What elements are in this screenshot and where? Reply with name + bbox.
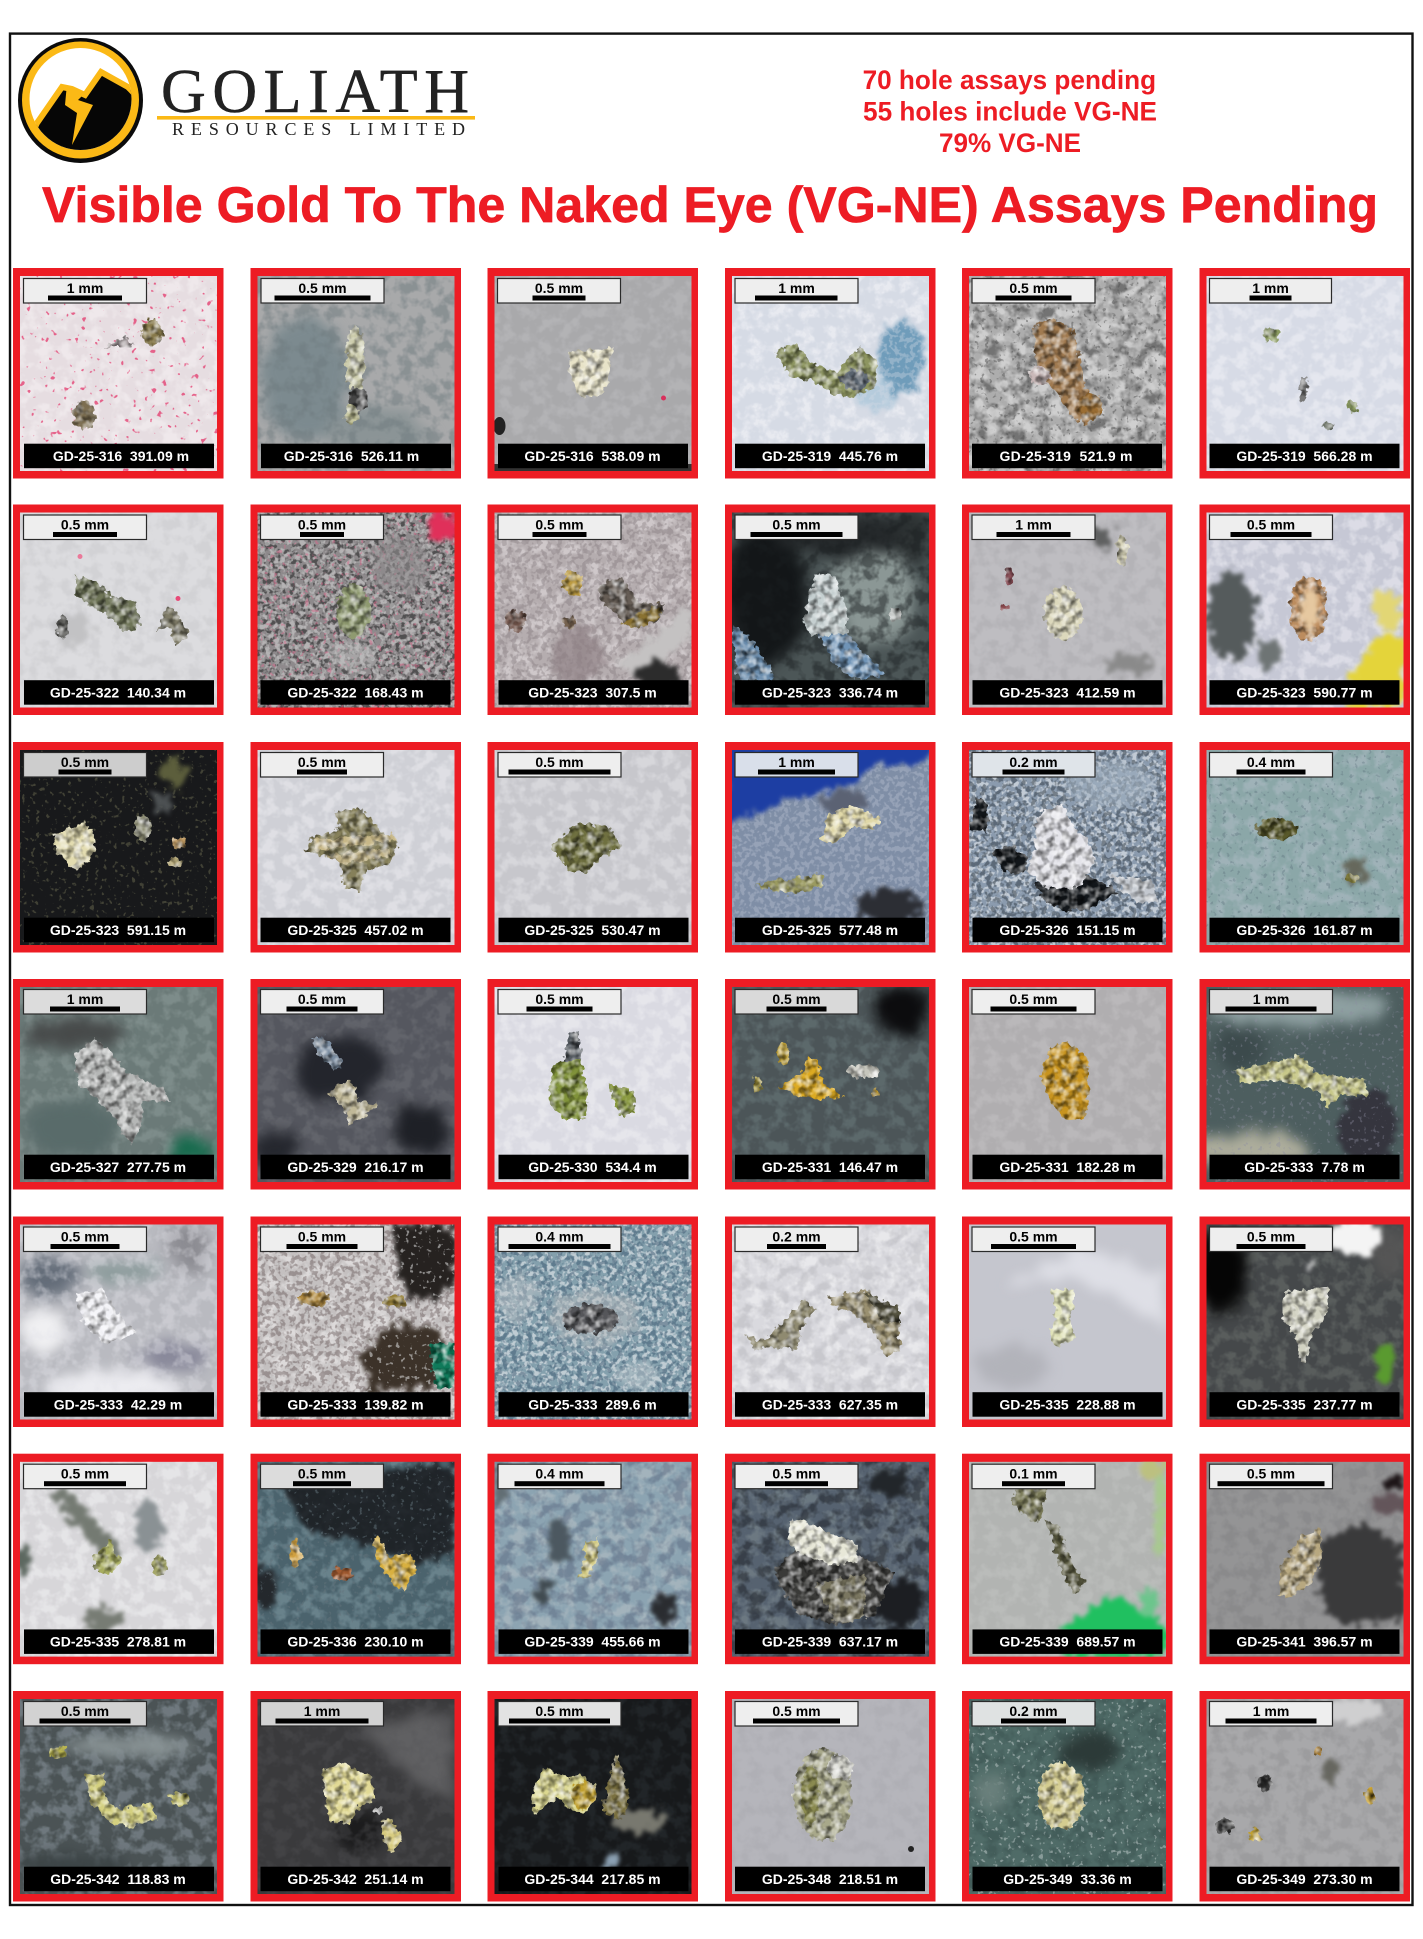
scale bar: 0.5 mm xyxy=(24,515,146,540)
scale bar: 0.5 mm xyxy=(498,278,620,303)
panel: GD-25-316 391.09 m xyxy=(13,268,224,478)
caption xyxy=(260,1629,450,1654)
scale bar: 1 mm xyxy=(735,278,858,303)
micrograph xyxy=(258,512,458,708)
panel: GD-25-330 534.4 m xyxy=(488,979,698,1190)
caption: GD-25-319 566.28 m xyxy=(1236,448,1373,464)
scale bar: 1 mm xyxy=(1210,990,1332,1014)
caption: GD-25-342 251.14 m xyxy=(287,1871,424,1887)
scale bar: 1 mm: 1 mm xyxy=(778,280,815,296)
scale bar: 0.5 mm xyxy=(1210,1227,1332,1252)
caption xyxy=(24,1867,214,1891)
callout: assay stats: 70 hole assays pending xyxy=(863,65,1156,95)
scale bar: 0.5 mm: 0.5 mm xyxy=(535,1703,584,1719)
caption xyxy=(498,1392,688,1417)
callout: assay stats: 55 holes include VG-NE xyxy=(863,97,1157,127)
micrograph xyxy=(254,1462,454,1657)
caption: GD-25-335 228.88 m xyxy=(999,1396,1136,1412)
scale bar: 0.5 mm: 0.5 mm xyxy=(535,991,584,1007)
caption xyxy=(24,444,214,468)
caption: GD-25-348 218.51 m xyxy=(762,1871,898,1887)
scale bar: 0.5 mm xyxy=(24,1464,146,1489)
micrograph xyxy=(494,1699,692,1894)
scale bar: 1 mm xyxy=(1210,1702,1332,1726)
scale bar: 0.5 mm: 0.5 mm xyxy=(772,1703,821,1719)
caption xyxy=(1210,680,1400,705)
scale bar: 0.5 mm xyxy=(1210,515,1332,540)
scale bar: 1 mm xyxy=(24,278,146,303)
title: Visible Gold To The Naked Eye (VG-NE) Assays Pending xyxy=(42,177,1378,233)
scale bar: 0.4 mm: 0.4 mm xyxy=(535,1228,584,1244)
scale bar: 0.5 mm xyxy=(735,1702,858,1726)
micrograph xyxy=(732,276,929,471)
scale bar: 0.5 mm: 0.5 mm xyxy=(772,991,821,1007)
micrograph xyxy=(732,1224,929,1420)
scale bar: 0.5 mm: 0.5 mm xyxy=(1247,1228,1295,1244)
micrograph xyxy=(1206,1462,1408,1657)
caption: GD-25-349 273.30 m xyxy=(1236,1871,1373,1887)
scale bar: 0.2 mm xyxy=(972,752,1095,777)
panel: GD-25-349 33.36 m xyxy=(962,1691,1172,1902)
caption xyxy=(498,918,688,942)
caption xyxy=(735,1155,925,1179)
micrograph xyxy=(252,987,454,1182)
caption xyxy=(498,1155,688,1179)
scale bar: 0.5 mm xyxy=(260,1227,384,1252)
panel: GD-25-316 538.09 m xyxy=(488,268,698,478)
scale bar: 0.5 mm xyxy=(972,1227,1095,1252)
micrograph xyxy=(969,750,1166,945)
logo: Goliath emblem xyxy=(18,38,143,163)
caption xyxy=(1210,1392,1400,1417)
caption xyxy=(735,1629,925,1654)
caption xyxy=(260,680,450,705)
scale bar: 0.5 mm xyxy=(24,752,146,777)
panel: GD-25-333 42.29 m xyxy=(13,1216,224,1427)
caption xyxy=(735,918,925,942)
scale bar: 1 mm xyxy=(1210,278,1332,303)
panel: GD-25-323 412.59 m xyxy=(962,504,1172,715)
micrograph xyxy=(969,1699,1166,1894)
caption xyxy=(498,680,688,705)
scale bar: 0.4 mm xyxy=(498,1464,621,1489)
caption xyxy=(498,444,688,468)
panel: GD-25-325 577.48 m xyxy=(725,742,936,952)
caption: GD-25-325 577.48 m xyxy=(762,922,898,938)
scale bar: 1 mm: 1 mm xyxy=(67,280,103,296)
micrograph xyxy=(494,276,692,471)
scale bar: 0.4 mm xyxy=(498,1227,621,1252)
scale bar: 0.5 mm: 0.5 mm xyxy=(1247,516,1295,532)
scale bar: 0.5 mm: 0.5 mm xyxy=(772,1466,821,1482)
caption: GD-25-322 168.43 m xyxy=(287,684,424,700)
panel: GD-25-341 396.57 m xyxy=(1200,1454,1410,1664)
caption: GD-25-333 289.6 m xyxy=(528,1396,657,1412)
micrograph xyxy=(258,750,454,945)
scale bar: 0.1 mm xyxy=(972,1464,1095,1489)
caption: GD-25-331 182.28 m xyxy=(999,1159,1136,1175)
scale bar: 0.4 mm: 0.4 mm xyxy=(535,1466,584,1482)
scale bar: 0.1 mm: 0.1 mm xyxy=(1009,1466,1058,1482)
caption: GD-25-341 396.57 m xyxy=(1236,1634,1373,1650)
caption: GD-25-331 146.47 m xyxy=(762,1159,898,1175)
micrograph xyxy=(1206,512,1404,708)
panel: GD-25-319 521.9 m xyxy=(962,268,1172,478)
micrograph xyxy=(969,1459,1168,1658)
caption xyxy=(1210,444,1400,468)
micrograph xyxy=(494,750,692,945)
scale bar: 0.5 mm xyxy=(24,1227,146,1252)
caption: GD-25-323 412.59 m xyxy=(999,684,1136,700)
caption: GD-25-316 526.11 m xyxy=(284,448,419,464)
caption xyxy=(735,1392,925,1417)
scale bar: 1 mm: 1 mm xyxy=(1253,1703,1289,1719)
caption: GD-25-326 161.87 m xyxy=(1236,922,1373,938)
caption: GD-25-327 277.75 m xyxy=(50,1159,186,1175)
micrograph xyxy=(1206,750,1404,945)
panel: GD-25-329 216.17 m xyxy=(250,979,461,1190)
caption xyxy=(972,680,1162,705)
panel: GD-25-344 217.85 m xyxy=(488,1691,698,1902)
panel: GD-25-339 637.17 m xyxy=(725,1454,936,1664)
micrograph xyxy=(969,1224,1166,1420)
scale bar: 1 mm: 1 mm xyxy=(778,754,815,770)
caption xyxy=(260,1392,450,1417)
micrograph xyxy=(969,987,1166,1182)
micrograph xyxy=(969,512,1166,708)
scale bar: 0.5 mm: 0.5 mm xyxy=(1009,1228,1058,1244)
caption: GD-25-316 538.09 m xyxy=(524,448,661,464)
panel: GD-25-342 118.83 m xyxy=(13,1691,224,1902)
micrograph xyxy=(494,987,692,1182)
caption xyxy=(972,1392,1162,1417)
caption xyxy=(24,680,214,705)
panel: GD-25-319 566.28 m xyxy=(1200,268,1410,478)
scale bar: 0.5 mm: 0.5 mm xyxy=(535,754,584,770)
micrograph xyxy=(494,512,692,708)
logo wordmark: GOLIATH xyxy=(161,58,469,126)
caption: GD-25-342 118.83 m xyxy=(50,1871,186,1887)
caption xyxy=(24,1155,214,1179)
micrograph xyxy=(258,1224,454,1420)
micrograph xyxy=(258,1699,454,1894)
scale bar: 0.5 mm xyxy=(498,752,621,777)
caption xyxy=(972,1155,1162,1179)
micrograph xyxy=(1206,276,1404,471)
scale bar: 0.5 mm: 0.5 mm xyxy=(535,516,584,532)
panel: GD-25-322 140.34 m xyxy=(13,504,224,715)
caption xyxy=(260,1155,450,1179)
panel: GD-25-336 230.10 m xyxy=(250,1454,461,1664)
caption xyxy=(498,1867,688,1891)
micrograph xyxy=(17,1220,217,1420)
caption: GD-25-319 521.9 m xyxy=(1000,448,1132,464)
scale bar: 1 mm xyxy=(735,752,858,777)
panel: GD-25-326 161.87 m xyxy=(1200,742,1410,952)
caption: GD-25-344 217.85 m xyxy=(524,1871,661,1887)
scale bar: 0.5 mm xyxy=(498,1702,621,1726)
panel: GD-25-323 590.77 m xyxy=(1200,504,1410,715)
scale bar: 1 mm: 1 mm xyxy=(304,1703,340,1719)
micrograph xyxy=(1194,1220,1410,1420)
caption xyxy=(972,918,1162,942)
scale bar: 0.5 mm: 0.5 mm xyxy=(298,991,346,1007)
panel: GD-25-316 526.11 m xyxy=(250,268,461,478)
micrograph xyxy=(17,1699,217,1894)
logo wordmark: RESOURCES LIMITED xyxy=(172,119,465,139)
panel: GD-25-333 289.6 m xyxy=(488,1216,698,1427)
panel: GD-25-342 251.14 m xyxy=(250,1691,461,1902)
caption: GD-25-326 151.15 m xyxy=(999,922,1136,938)
scale bar: 0.2 mm: 0.2 mm xyxy=(772,1228,821,1244)
caption xyxy=(261,444,451,468)
callout: assay stats xyxy=(863,65,1157,158)
panel: GD-25-333 7.78 m xyxy=(1190,979,1410,1190)
scale bar: 0.5 mm xyxy=(735,990,858,1014)
scale bar: 1 mm: 1 mm xyxy=(1253,991,1289,1007)
caption: GD-25-335 237.77 m xyxy=(1236,1396,1373,1412)
caption: GD-25-333 42.29 m xyxy=(54,1396,182,1412)
scale bar: 0.4 mm xyxy=(1210,752,1332,777)
scale bar: 0.5 mm: 0.5 mm xyxy=(61,1228,109,1244)
caption: GD-25-339 637.17 m xyxy=(762,1634,898,1650)
panel: GD-25-335 237.77 m xyxy=(1194,1216,1410,1427)
scale bar: 0.2 mm: 0.2 mm xyxy=(1009,754,1058,770)
micrograph xyxy=(258,276,454,471)
panel: GD-25-325 457.02 m xyxy=(250,742,461,952)
micrograph xyxy=(494,1462,692,1657)
scale bar: 0.5 mm: 0.5 mm xyxy=(298,1228,346,1244)
scale bar: 0.5 mm: 0.5 mm xyxy=(1009,280,1058,296)
panel: GD-25-331 146.47 m xyxy=(725,979,936,1190)
micrograph xyxy=(20,750,217,945)
caption: GD-25-319 445.76 m xyxy=(762,448,898,464)
micrograph xyxy=(732,983,931,1182)
panel: GD-25-322 168.43 m xyxy=(250,504,461,715)
caption xyxy=(260,1867,450,1891)
scale bar: 1 mm xyxy=(24,990,146,1014)
caption: GD-25-325 530.47 m xyxy=(524,922,661,938)
micrograph xyxy=(20,512,217,708)
micrograph xyxy=(494,1224,692,1420)
micrograph xyxy=(20,987,217,1182)
caption xyxy=(24,1392,214,1417)
caption xyxy=(972,1867,1162,1891)
micrograph xyxy=(15,1462,217,1657)
scale bar: 0.5 mm: 0.5 mm xyxy=(61,1466,109,1482)
caption: GD-25-335 278.81 m xyxy=(50,1634,186,1650)
caption: GD-25-323 590.77 m xyxy=(1236,684,1373,700)
scale bar: 1 mm: 1 mm xyxy=(1015,516,1052,532)
scale bar: 0.5 mm xyxy=(260,1464,384,1489)
scale bar: 0.5 mm xyxy=(735,515,858,540)
scale bar: 0.5 mm xyxy=(972,990,1095,1014)
caption: GD-25-323 591.15 m xyxy=(50,922,186,938)
caption xyxy=(972,1629,1162,1654)
caption xyxy=(972,444,1162,468)
caption xyxy=(24,1629,214,1654)
caption: GD-25-322 140.34 m xyxy=(50,684,186,700)
caption: GD-25-333 627.35 m xyxy=(762,1396,898,1412)
panel: GD-25-326 151.15 m xyxy=(962,742,1172,952)
caption: GD-25-333 7.78 m xyxy=(1244,1159,1365,1175)
scale bar: 0.5 mm: 0.5 mm xyxy=(298,754,346,770)
scale bar: 0.5 mm xyxy=(735,1464,858,1489)
panel: GD-25-331 182.28 m xyxy=(962,979,1172,1190)
caption xyxy=(1210,918,1400,942)
scale bar: 0.5 mm: 0.5 mm xyxy=(61,754,109,770)
scale bar: 0.5 mm: 0.5 mm xyxy=(298,1466,346,1482)
scale bar: 1 mm: 1 mm xyxy=(1252,280,1289,296)
scale bar: 0.5 mm xyxy=(972,278,1095,303)
panel: GD-25-327 277.75 m xyxy=(13,979,224,1190)
panel: GD-25-323 591.15 m xyxy=(13,742,224,952)
micrograph xyxy=(1206,1699,1404,1894)
scale bar: 0.5 mm xyxy=(260,990,384,1014)
panel: GD-25-335 278.81 m xyxy=(13,1454,224,1664)
caption: GD-25-333 139.82 m xyxy=(287,1396,424,1412)
caption xyxy=(1210,1155,1400,1179)
scale bar: 0.5 mm xyxy=(260,752,384,777)
panel: GD-25-319 445.76 m xyxy=(725,268,936,478)
callout: assay stats: 79% VG-NE xyxy=(939,128,1081,158)
panel: GD-25-323 336.74 m xyxy=(723,504,936,715)
panel: GD-25-335 228.88 m xyxy=(962,1216,1172,1427)
scale bar: 0.5 mm: 0.5 mm xyxy=(1247,1466,1295,1482)
panel: GD-25-349 273.30 m xyxy=(1200,1691,1410,1902)
panel: GD-25-333 139.82 m xyxy=(250,1216,461,1427)
panel: GD-25-323 307.5 m xyxy=(488,504,698,715)
scale bar: 0.5 mm: 0.5 mm xyxy=(298,280,347,296)
scale bar: 0.2 mm xyxy=(972,1702,1095,1726)
scale bar: 0.5 mm: 0.5 mm xyxy=(298,516,346,532)
scale bar: 0.5 mm: 0.5 mm xyxy=(772,516,821,532)
panel: GD-25-333 627.35 m xyxy=(725,1216,936,1427)
micrograph xyxy=(732,1699,929,1894)
scale bar: 0.5 mm xyxy=(1210,1464,1332,1489)
micrograph xyxy=(1190,987,1404,1182)
caption: GD-25-323 307.5 m xyxy=(528,684,657,700)
caption: GD-25-325 457.02 m xyxy=(287,922,424,938)
micrograph xyxy=(723,504,931,708)
scale bar: 0.5 mm: 0.5 mm xyxy=(535,280,583,296)
scale bar: 0.5 mm xyxy=(24,1702,146,1726)
scale bar: 1 mm xyxy=(260,1702,384,1726)
caption: GD-25-330 534.4 m xyxy=(528,1159,657,1175)
caption xyxy=(735,444,925,468)
scale bar: 0.5 mm xyxy=(498,990,621,1014)
caption xyxy=(735,1867,925,1891)
caption: GD-25-349 33.36 m xyxy=(1003,1871,1132,1887)
caption: GD-25-339 689.57 m xyxy=(999,1634,1136,1650)
panel: GD-25-325 530.47 m xyxy=(488,742,698,952)
scale bar: 0.5 mm xyxy=(260,515,384,540)
caption: GD-25-323 336.74 m xyxy=(762,684,898,700)
caption: GD-25-339 455.66 m xyxy=(524,1634,661,1650)
scale bar: 0.5 mm: 0.5 mm xyxy=(1009,991,1058,1007)
caption: GD-25-316 391.09 m xyxy=(53,448,189,464)
scale bar: 0.2 mm: 0.2 mm xyxy=(1009,1703,1058,1719)
caption xyxy=(1210,1867,1400,1891)
micrograph xyxy=(732,1462,929,1657)
scale bar: 0.4 mm: 0.4 mm xyxy=(1247,754,1295,770)
caption xyxy=(498,1629,688,1654)
scale bar: 1 mm xyxy=(972,515,1095,540)
caption: GD-25-336 230.10 m xyxy=(287,1634,424,1650)
scale bar: 0.5 mm xyxy=(498,515,621,540)
panel: GD-25-348 218.51 m xyxy=(725,1691,936,1902)
micrograph xyxy=(20,276,217,471)
caption xyxy=(24,918,214,942)
micrograph xyxy=(725,742,929,945)
micrograph xyxy=(969,276,1166,471)
caption xyxy=(260,918,450,942)
scale bar: 0.5 mm: 0.5 mm xyxy=(61,516,109,532)
scale bar: 1 mm: 1 mm xyxy=(67,991,103,1007)
panel: GD-25-339 455.66 m xyxy=(488,1454,698,1664)
caption xyxy=(735,680,925,705)
caption: GD-25-329 216.17 m xyxy=(287,1159,424,1175)
scale bar: 0.5 mm: 0.5 mm xyxy=(61,1703,109,1719)
caption xyxy=(1210,1629,1400,1654)
scale bar: 0.2 mm xyxy=(735,1227,858,1252)
scale bar: 0.5 mm xyxy=(261,278,384,303)
panel: GD-25-339 689.57 m xyxy=(962,1454,1172,1664)
